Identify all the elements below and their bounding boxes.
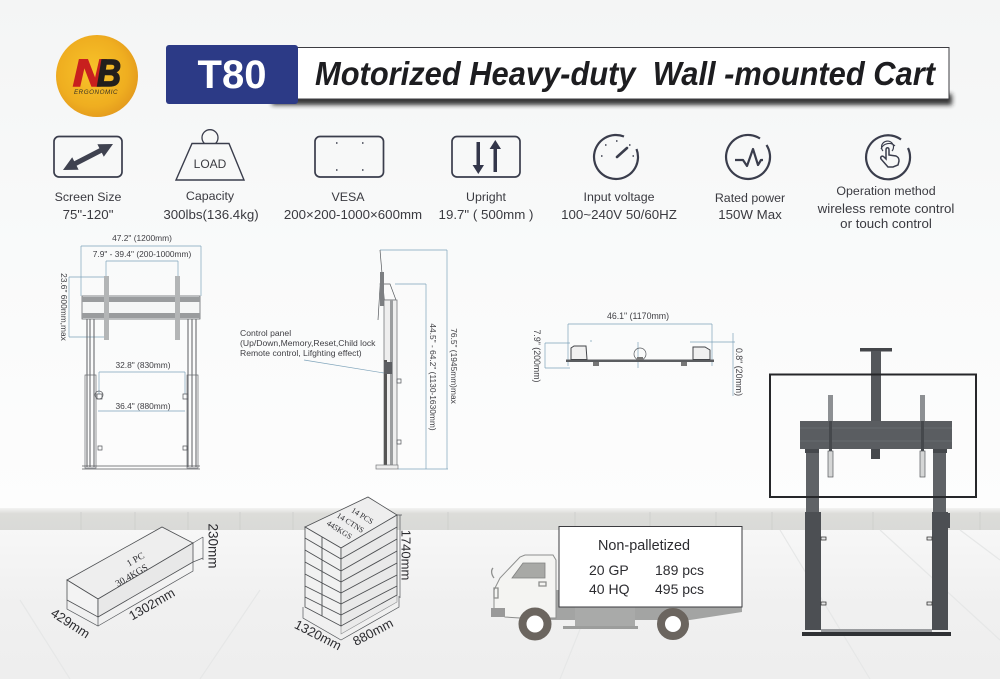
spec: capacity: Capacity [186, 189, 235, 203]
package: pallet stack: 445KGS [325, 519, 354, 541]
spec: VESA: VESA [331, 190, 365, 204]
diagram: top view: 0.8" (20mm) [734, 348, 744, 396]
container table: 495 pcs [655, 581, 704, 597]
spec: upright [439, 136, 533, 222]
spec: capacity: LOAD [194, 157, 227, 171]
spec: rated power [715, 135, 785, 222]
diagram: side view: (Up/Down,Memory,Reset,Child lock [240, 338, 376, 348]
spec: input voltage [561, 135, 677, 222]
product photo: motorized cart [770, 348, 976, 636]
package: single carton: 230mm [206, 523, 220, 569]
spec: rated power: Rated power [715, 191, 785, 205]
truck with container table [491, 526, 742, 636]
spec: screen size: 75"-120" [63, 207, 114, 222]
package: single carton [48, 523, 221, 641]
package: single carton: 30.4KGS [114, 563, 150, 590]
spec: VESA: 200×200-1000×600mm [284, 207, 422, 222]
container table: Non-palletized [598, 538, 690, 554]
package: single carton: 1302mm [126, 585, 177, 623]
container table: 20 GP [589, 562, 629, 578]
package: pallet stack: 14 PCS [350, 506, 375, 526]
diagram: front view: 7.9" - 39.4" (200-1000mm) [93, 249, 191, 259]
diagram: front view: 47.2" (1200mm) [112, 233, 172, 243]
spec: screen size: Screen Size [55, 190, 122, 204]
diagram: side view: 44.5" - 64.2" (1130-1630mm) [428, 323, 438, 431]
spec: screen size [54, 136, 122, 222]
title banner: T80 [198, 53, 266, 97]
package: single carton: 1 PC [125, 551, 147, 569]
diagram: side view: Control panel [240, 328, 291, 338]
container table [559, 526, 742, 607]
logo [56, 35, 138, 117]
spec: upright: Upright [466, 190, 507, 204]
spec: VESA [284, 136, 422, 222]
logo: ERGONOMIC [74, 89, 118, 96]
spec: operation method: Operation method [836, 184, 936, 198]
spec: capacity [163, 130, 259, 222]
spec: upright: 19.7" ( 500mm ) [439, 207, 533, 222]
diagram: top view: 46.1" (1170mm) [607, 311, 669, 321]
title banner: Motorized Heavy-duty Wall -mounted Cart [315, 55, 937, 92]
container table: 189 pcs [655, 562, 704, 578]
package: pallet stack: 14 CTNS [335, 511, 366, 535]
diagram: front view [59, 233, 201, 469]
spec: operation method: or touch control [840, 216, 932, 231]
diagram: front view: 23.6" 600mm,max [59, 273, 69, 342]
diagram: front view: 36.4" (880mm) [115, 401, 171, 411]
spec: capacity: 300lbs(136.4kg) [163, 207, 259, 222]
spec: operation method [817, 135, 954, 231]
spec: rated power: 150W Max [718, 207, 782, 222]
container table: 40 HQ [589, 581, 630, 597]
logo: B [97, 53, 121, 95]
package: pallet stack [292, 497, 414, 653]
logo: N [73, 53, 107, 95]
title banner [166, 45, 952, 105]
diagram: side view: Remote control, Lifghting effect) [240, 348, 362, 358]
package: pallet stack: 1740mm [398, 530, 414, 580]
package: pallet stack: 1320mm [292, 617, 344, 653]
diagram: side view: 76.5" (1945mm)max [449, 328, 459, 405]
diagram: side view [240, 250, 459, 469]
spec: operation method: wireless remote control [817, 201, 954, 216]
spec: input voltage: Input voltage [584, 190, 655, 204]
diagram: top view: 7.9" (200mm) [532, 330, 542, 383]
package: pallet stack: 880mm [350, 615, 396, 649]
diagram: front view: 32.8" (830mm) [115, 360, 171, 370]
spec: input voltage: 100~240V 50/60HZ [561, 207, 677, 222]
package: single carton: 429mm [48, 605, 93, 641]
diagram: top view [532, 311, 744, 396]
